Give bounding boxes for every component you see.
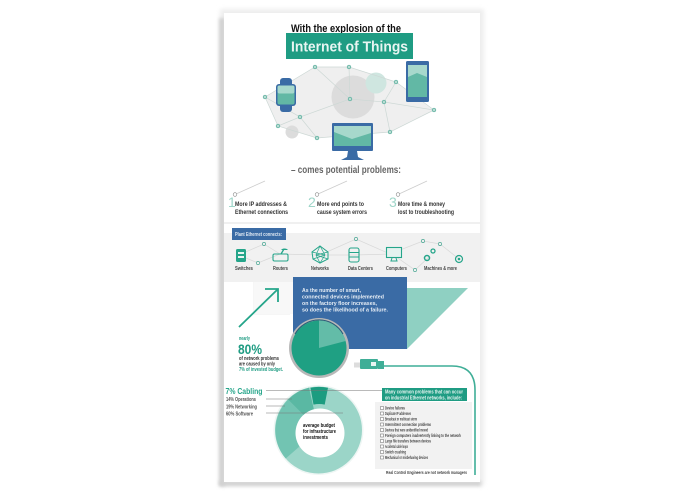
label: plant Ethernet connects — [232, 228, 286, 240]
problem 1: 1 — [228, 194, 236, 210]
icon: switches — [235, 249, 253, 272]
icon: desktop monitor — [332, 123, 373, 160]
statistic: 80 percent: 80% — [238, 341, 262, 357]
donut legend: 60% Software — [226, 412, 253, 418]
problem 2: More end points to — [317, 202, 364, 208]
donut chart: for infrastructure — [303, 429, 336, 435]
panel: common problems checklist: Devices that were unidentified moved — [385, 428, 428, 432]
panel: common problems checklist: Duplicate IP addresses — [385, 411, 411, 416]
icon: networks: Networks — [311, 266, 329, 272]
panel: plant Ethernet connects — [224, 228, 480, 282]
callout — [293, 277, 407, 349]
donut chart: investments — [303, 435, 328, 441]
pie chart — [289, 318, 349, 378]
icon: switches: Switches — [235, 266, 253, 272]
network illustration — [263, 65, 436, 140]
panel: common problems checklist: Mechanical or misbehaving devices — [385, 455, 428, 460]
panel: common problems checklist — [375, 388, 472, 476]
donut legend — [226, 387, 382, 418]
statistic: 80 percent: 7% of invested budget. — [239, 367, 283, 373]
title: Internet of Things — [291, 40, 408, 56]
problem 1 — [228, 181, 289, 216]
problem 2: 2 — [308, 194, 316, 210]
problem 3: 3 — [389, 194, 397, 210]
callout: As the number of smart, — [302, 288, 361, 294]
panel: common problems checklist: Broadcast or multicast storm — [385, 416, 417, 422]
problem 3: More time & money — [398, 202, 446, 208]
growth arrow — [239, 282, 293, 327]
icon: routers — [273, 248, 288, 272]
panel: common problems checklist: Large file transfers between devices — [385, 438, 431, 444]
problem 2 — [308, 181, 368, 216]
infographic card — [219, 9, 484, 486]
panel: common problems checklist: Real Control Engineers are not network managers — [386, 470, 467, 476]
callout: connected devices implemented — [302, 294, 384, 300]
problem 2: cause system errors — [317, 210, 368, 216]
donut chart: average budget — [303, 423, 335, 429]
donut legend: 19% Networking — [226, 404, 257, 410]
problem 3: lost to troubleshooting — [398, 210, 454, 216]
callout: on the factory floor increases, — [302, 301, 377, 307]
problem 1: More IP addresses & — [235, 202, 288, 208]
title — [286, 23, 413, 59]
statistic: 80 percent: of network problems — [239, 356, 279, 362]
panel: common problems checklist: Accidental cable loops — [385, 444, 408, 449]
icon: data centers — [348, 248, 373, 272]
panel: common problems checklist: Intermittent connection problems — [385, 422, 431, 427]
statistic: 80 percent: nearly — [239, 336, 250, 342]
icon: routers: Routers — [273, 266, 288, 272]
icon: computers — [386, 248, 407, 272]
title: With the explosion of the — [291, 23, 401, 35]
problem 3 — [389, 181, 454, 216]
icon: data centers: Data Centers — [348, 266, 373, 272]
icon: tablet — [406, 61, 429, 102]
donut legend: 14% Operations — [226, 397, 256, 403]
callout: so does the likelihood of a failure. — [302, 308, 388, 314]
donut legend: 7% Cabling — [226, 387, 263, 396]
icon: machines: Machines & more — [424, 266, 457, 272]
teal triangle — [407, 288, 468, 349]
icon: smart watch — [276, 78, 296, 112]
problem 1: Ethernet connections — [235, 210, 289, 216]
statistic: 80 percent — [238, 336, 283, 373]
statistic: 80 percent: are caused by only — [239, 362, 275, 368]
panel: common problems checklist: Switch crashing — [385, 450, 406, 454]
icon: machines — [424, 249, 462, 272]
icon: computers: Computers — [386, 266, 407, 272]
icon: ethernet plug and cable — [354, 359, 475, 475]
subheading: – comes potential problems: — [291, 165, 401, 176]
label: plant Ethernet connects: Plant Ethernet connects: — [235, 232, 282, 238]
panel: common problems checklist: on industrial Ethernet networks, include: — [385, 396, 462, 402]
panel: common problems checklist: Foreign computers inadvertently linking to the network — [385, 433, 461, 438]
donut chart — [274, 385, 364, 475]
panel: common problems checklist: Device failures — [385, 406, 405, 410]
icon: networks — [311, 246, 329, 272]
panel: common problems checklist: Many common problems that can occur — [385, 390, 464, 396]
